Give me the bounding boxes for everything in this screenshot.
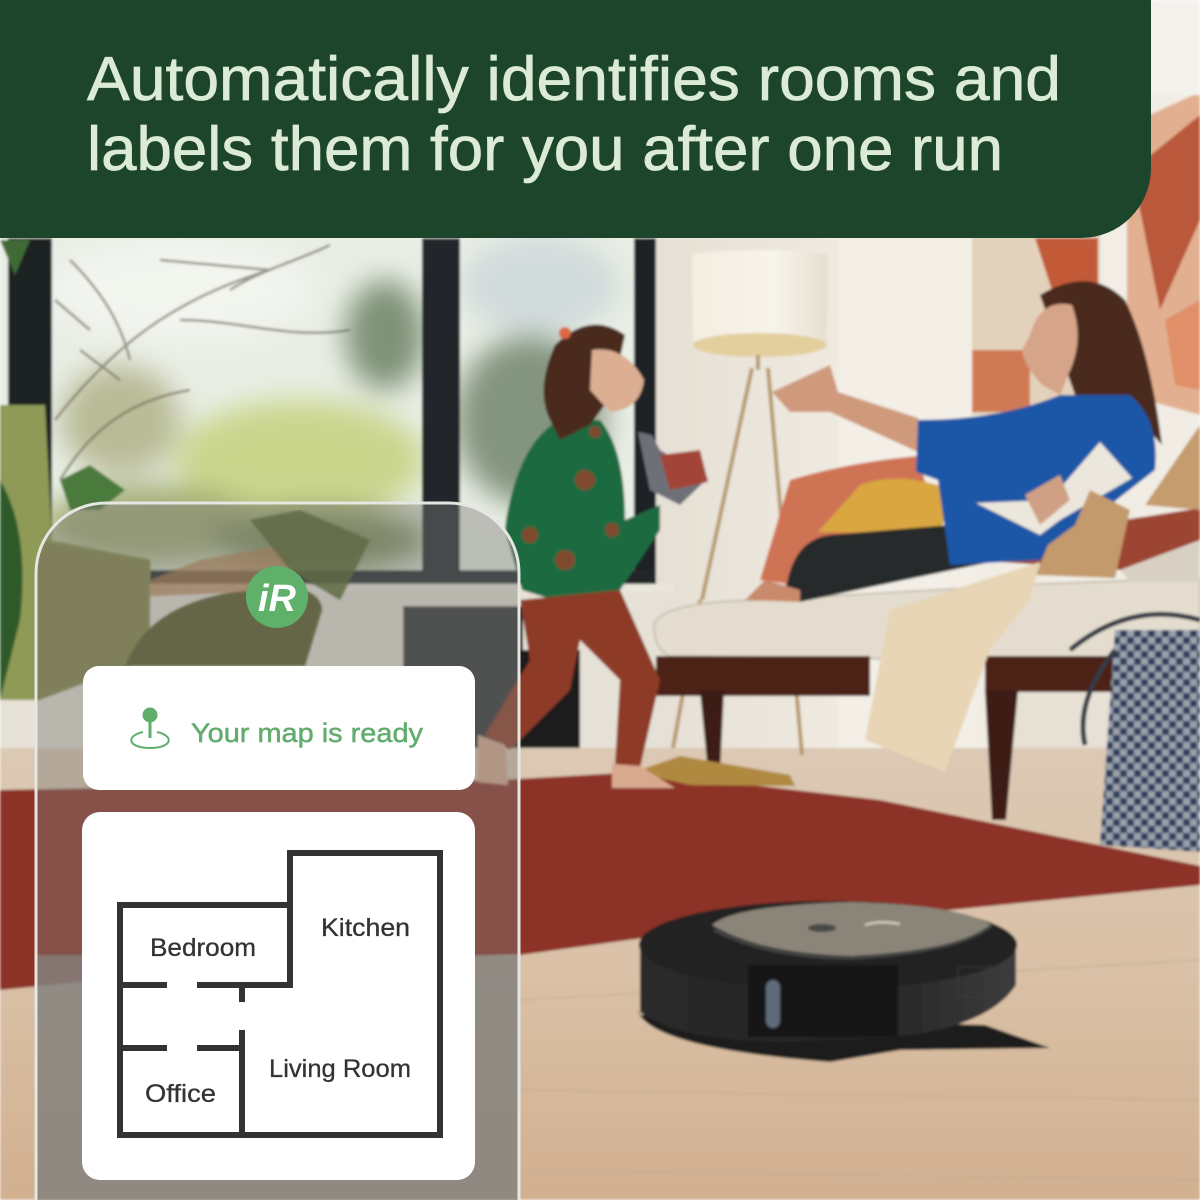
sofa [654, 425, 1200, 820]
app badge [246, 566, 308, 628]
rug [0, 772, 1200, 990]
header banner [0, 0, 1151, 238]
app badge: iR [258, 578, 297, 620]
phone outline [36, 503, 519, 1200]
floor [0, 748, 1200, 1200]
room labels: Bedroom [150, 934, 256, 962]
tote bag [1070, 614, 1200, 852]
icon: map pin [131, 708, 169, 748]
wall [0, 0, 1200, 800]
notification card [83, 666, 475, 790]
woman [745, 281, 1162, 602]
headline: labels them for you after one run [87, 115, 1003, 184]
floor plan walls [120, 853, 440, 1135]
room labels: Kitchen [321, 914, 410, 942]
floor plan card [82, 812, 475, 1180]
window sill and radiator [0, 584, 674, 592]
phone overlay tint [36, 503, 519, 1200]
lamp [673, 250, 828, 755]
headline: Automatically identifies rooms and [87, 45, 1061, 114]
room labels [145, 914, 411, 1108]
room labels: Office [145, 1080, 216, 1108]
child [478, 325, 708, 788]
slippers [640, 756, 795, 786]
windows [0, 235, 656, 588]
room labels: Living Room [269, 1055, 411, 1083]
art [972, 0, 1200, 415]
plant and chair left [0, 240, 150, 700]
robot vacuum [637, 901, 1050, 1062]
notification text: Your map is ready [191, 718, 424, 748]
blanket [865, 562, 1040, 772]
